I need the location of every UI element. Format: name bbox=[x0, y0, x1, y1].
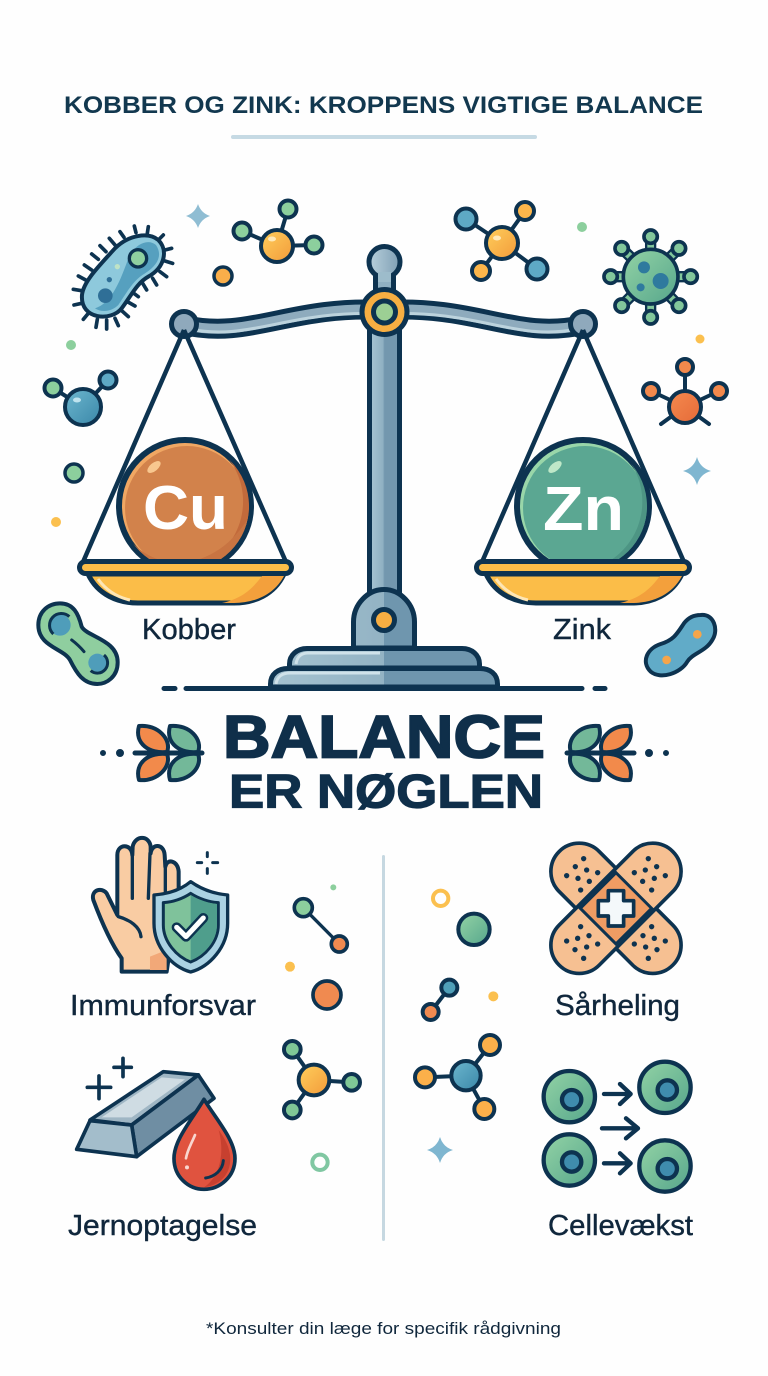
copper ball: Cu bbox=[143, 474, 228, 543]
title underline bbox=[231, 135, 537, 139]
center hub bbox=[362, 290, 407, 334]
icon: peanut bacterium left bbox=[38, 603, 118, 684]
ground line bbox=[164, 686, 605, 691]
molecule top left bbox=[234, 200, 322, 262]
icon: bacterium top left bbox=[73, 226, 173, 329]
icon: iron bar with blood drop bbox=[77, 1058, 235, 1189]
title: KOBBER OG ZINK: KROPPENS VIGTIGE BALANCE bbox=[64, 92, 703, 119]
copper ball bbox=[119, 440, 251, 580]
scale base bbox=[270, 590, 498, 687]
dot yellow right bbox=[696, 334, 704, 344]
scale column bbox=[369, 246, 400, 600]
molecule right lower bbox=[415, 1035, 500, 1119]
icon: crossed bandages bbox=[539, 831, 693, 985]
label: Cellevækst: Cellevækst bbox=[548, 1210, 693, 1242]
right pivot knob bbox=[570, 312, 596, 336]
molecule left bbox=[44, 372, 116, 425]
molecule top right bbox=[456, 202, 548, 280]
left strings bbox=[83, 330, 286, 562]
molecules right middle bbox=[423, 891, 498, 1020]
zinc ball: Zn bbox=[543, 475, 624, 544]
balance scale bbox=[80, 246, 690, 688]
leaf sprig left bbox=[101, 726, 202, 780]
zinc ball bbox=[517, 440, 649, 572]
dot green ring bbox=[65, 464, 83, 482]
icon: hand with shield bbox=[93, 838, 228, 972]
molecule left lower bbox=[284, 1041, 360, 1170]
left pivot knob bbox=[172, 312, 196, 336]
label: Sårheling: Sårheling bbox=[555, 990, 680, 1022]
molecule right orange bbox=[643, 359, 727, 424]
label: Immunforsvar: Immunforsvar bbox=[70, 990, 256, 1022]
scale beam bbox=[184, 310, 583, 332]
dot green top right bbox=[577, 222, 587, 232]
left pan bbox=[80, 562, 292, 603]
sparkle top bbox=[186, 204, 210, 228]
leaf sprig right bbox=[567, 726, 668, 780]
molecules left middle bbox=[285, 884, 347, 1009]
right strings bbox=[482, 330, 684, 562]
heading: er nøglen: ER NØGLEN bbox=[229, 764, 543, 818]
center divider bbox=[382, 855, 385, 1241]
dot green bbox=[66, 340, 76, 350]
dot yellow bbox=[51, 517, 61, 527]
right pan bbox=[476, 562, 690, 603]
icon: cell division bbox=[544, 1062, 691, 1192]
heading: balance: BALANCE bbox=[223, 704, 545, 770]
label: Jernoptagelse: Jernoptagelse bbox=[68, 1210, 257, 1242]
label: Kobber: Kobber bbox=[142, 614, 236, 646]
sparkle lower bbox=[427, 1137, 453, 1163]
label: Zink: Zink bbox=[553, 614, 612, 646]
icon: virus bbox=[604, 230, 697, 324]
footnote: *Konsulter din læge for specifik rådgivning bbox=[206, 1319, 561, 1338]
sparkle right bbox=[683, 457, 711, 485]
icon: bean bacterium right bbox=[646, 615, 715, 675]
dot orange ring bbox=[214, 267, 232, 285]
